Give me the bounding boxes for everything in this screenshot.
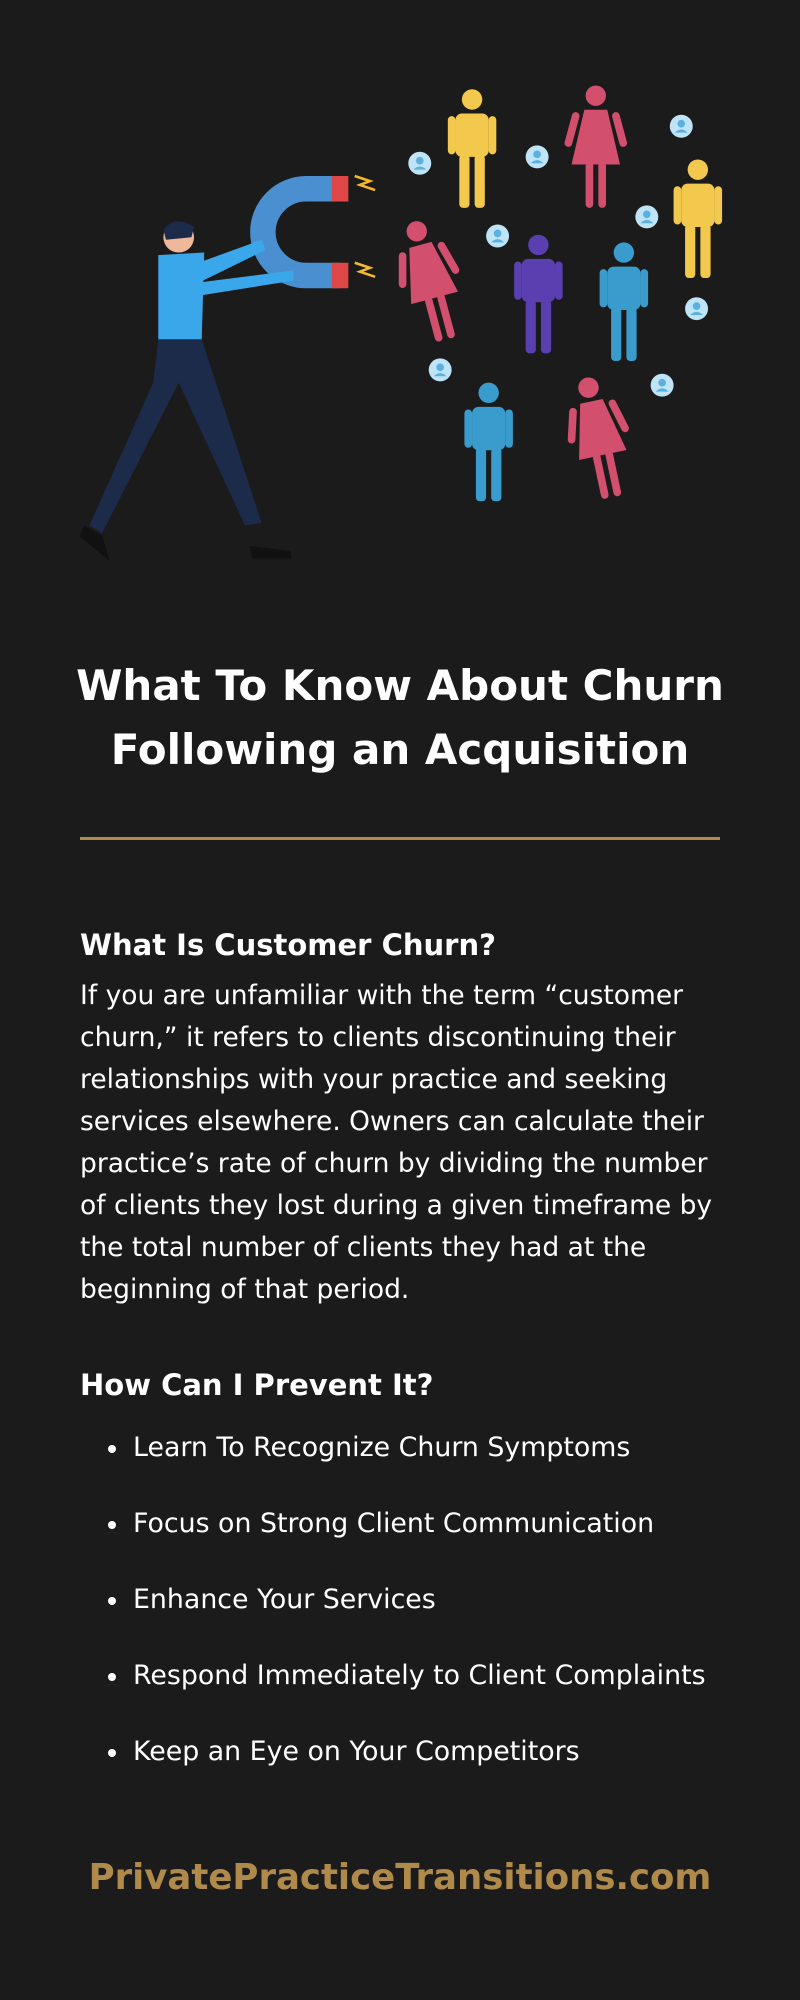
paragraph: services elsewhere. Owners can calculate their xyxy=(80,1106,704,1137)
bullet list: Learn To Recognize Churn Symptoms xyxy=(133,1432,630,1463)
bullet list: Focus on Strong Client Communication xyxy=(133,1508,654,1539)
bullet list: Keep an Eye on Your Competitors xyxy=(133,1736,580,1767)
paragraph: If you are unfamiliar with the term “customer xyxy=(80,980,683,1011)
bullet list: Respond Immediately to Client Complaints xyxy=(133,1660,706,1691)
title xyxy=(76,661,724,774)
magnet xyxy=(263,176,375,288)
heading: What Is Customer Churn? xyxy=(80,928,496,962)
bullet list: Enhance Your Services xyxy=(133,1584,436,1615)
people xyxy=(383,85,722,504)
footer url: PrivatePracticeTransitions.com xyxy=(89,1857,711,1898)
illustration: magnet attracting people xyxy=(80,86,722,560)
paragraph xyxy=(80,980,712,1305)
section: what is customer churn xyxy=(80,928,712,1305)
heading: How Can I Prevent It? xyxy=(80,1368,433,1402)
paragraph: practice’s rate of churn by dividing the number xyxy=(80,1148,708,1179)
title: Following an Acquisition xyxy=(111,725,689,774)
paragraph: of clients they lost during a given timeframe by xyxy=(80,1190,712,1221)
title: What To Know About Churn xyxy=(76,661,724,710)
paragraph: the total number of clients they had at the xyxy=(80,1232,646,1263)
man xyxy=(79,221,293,561)
bullet list xyxy=(108,1432,706,1767)
section: prevention xyxy=(80,1368,706,1767)
paragraph: churn,” it refers to clients discontinuing their xyxy=(80,1022,676,1053)
paragraph: relationships with your practice and seeking xyxy=(80,1064,667,1095)
paragraph: beginning of that period. xyxy=(80,1274,409,1305)
